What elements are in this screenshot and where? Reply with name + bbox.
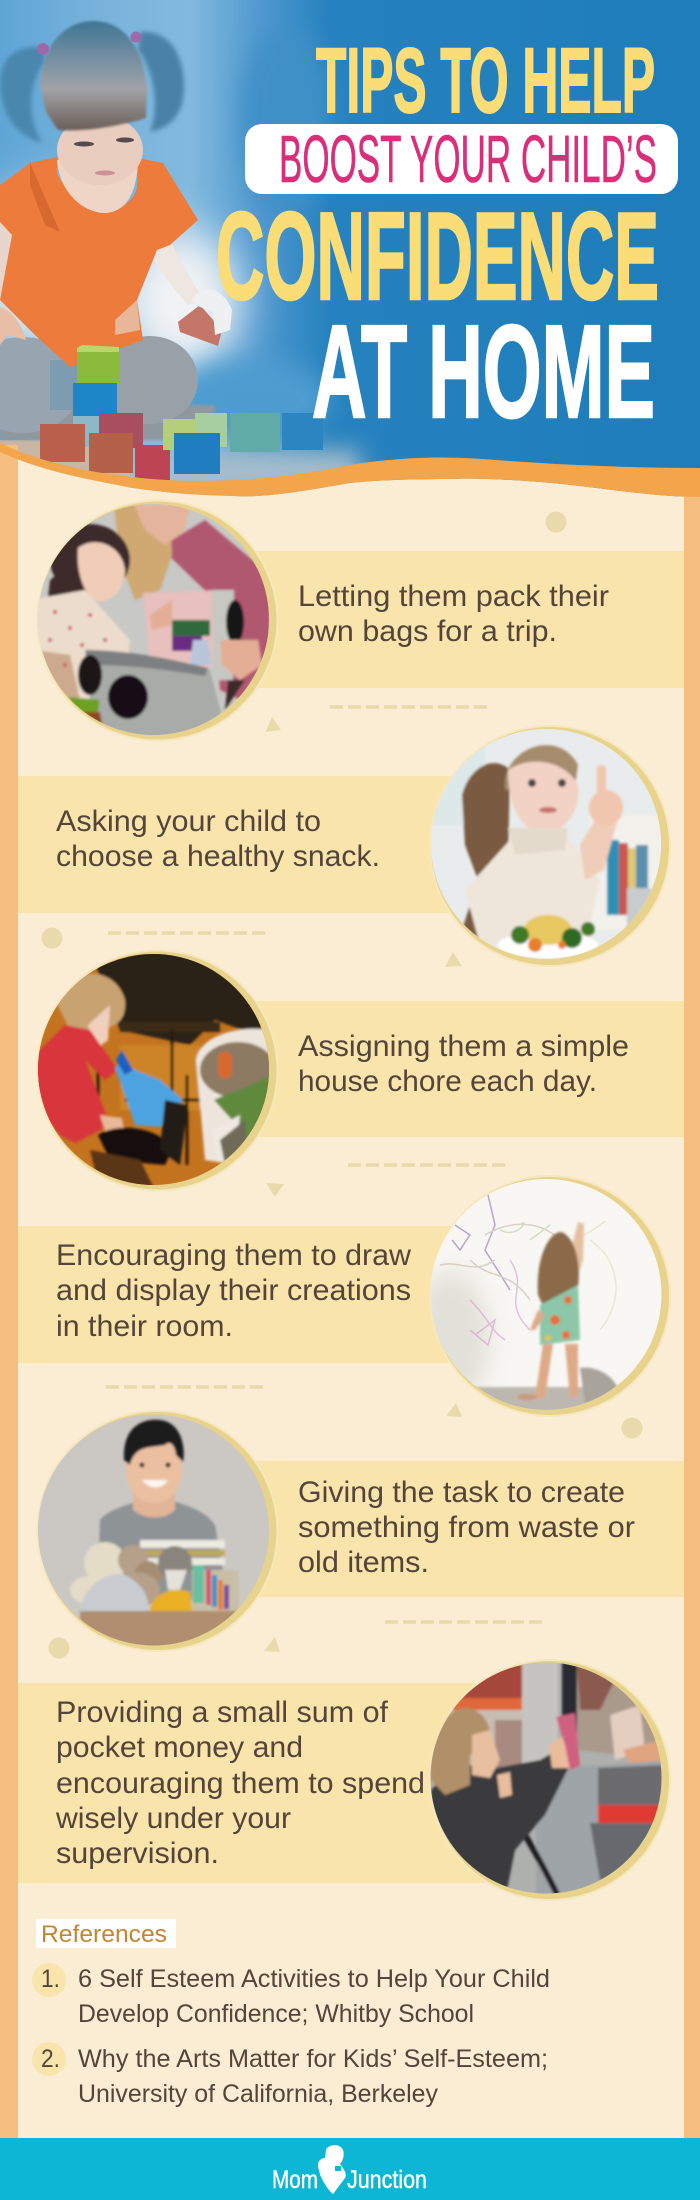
tip text: house chore each day.	[298, 1065, 597, 1098]
band	[18, 1226, 468, 1363]
title pill	[245, 124, 678, 194]
tip text: Letting them pack their	[298, 580, 609, 613]
band	[18, 1683, 488, 1883]
tip text: Giving the task to create	[298, 1476, 625, 1509]
logo: MomJunction: Junction	[347, 2166, 427, 2194]
tip text: choose a healthy snack.	[56, 840, 380, 873]
left hand	[0, 307, 26, 345]
rug and legs	[0, 405, 215, 440]
logo: MomJunction: Mom	[272, 2166, 318, 2194]
tip text: Providing a small sum of	[56, 1696, 389, 1729]
panel: tip 1	[30, 500, 684, 745]
icon: mother and child heart	[318, 2145, 346, 2194]
band	[240, 1461, 684, 1597]
photo ring	[430, 726, 670, 966]
photo: boy with a box of toys	[38, 1414, 269, 1646]
shirt and body	[0, 222, 12, 300]
tip text: own bags for a trip.	[298, 615, 557, 648]
panel: tip 5	[30, 1410, 684, 1658]
photo ring	[38, 1411, 278, 1651]
reference 2	[32, 2042, 548, 2108]
reference 1: Develop Confidence; Whitby School	[78, 2000, 474, 2028]
tip text: something from waste or	[298, 1511, 635, 1544]
panel: tip 4	[18, 1175, 670, 1438]
title	[216, 30, 678, 445]
band	[18, 776, 468, 913]
tip text: supervision.	[56, 1837, 219, 1870]
photo ring	[430, 1660, 670, 1900]
band	[240, 1001, 684, 1137]
footer	[0, 2138, 700, 2200]
photo ring	[38, 500, 278, 740]
photo: girl thumbs up with a healthy plate	[431, 729, 661, 959]
reference 1: 1.	[41, 1965, 60, 1993]
panel: tip 3	[30, 950, 684, 1197]
reference 2: Why the Arts Matter for Kids’ Self-Esteem;	[78, 2045, 548, 2073]
tip text: wisely under your	[55, 1802, 291, 1835]
decoration	[266, 512, 566, 732]
panel: tip 2	[18, 725, 670, 967]
cream page body	[0, 445, 700, 2200]
logo: MomJunction	[272, 2145, 427, 2194]
photo ring	[38, 950, 278, 1190]
pigtails	[0, 32, 184, 143]
tip text: old items.	[298, 1546, 429, 1579]
photo: child paying at a checkout	[425, 1660, 670, 1900]
tip text: in their room.	[56, 1310, 233, 1343]
tip text: pocket money and	[56, 1731, 303, 1764]
decoration	[42, 928, 462, 967]
reference 2: 2.	[41, 2045, 60, 2073]
references heading: References	[41, 1921, 167, 1948]
orange wave divider	[0, 443, 700, 497]
blocks	[77, 352, 119, 384]
tip text: Asking your child to	[56, 805, 321, 838]
tip text: and display their creations	[56, 1274, 411, 1307]
band	[240, 551, 684, 688]
photo: child sweeping a spill	[38, 954, 269, 1185]
panel: tip 6	[18, 1660, 670, 1900]
tip text: encouraging them to spend	[56, 1767, 425, 1800]
photo ring	[430, 1176, 670, 1416]
photo: girl drawing on a wall	[430, 1179, 662, 1410]
reference 2: University of California, Berkeley	[78, 2080, 438, 2108]
hair	[40, 21, 147, 130]
decoration	[48, 1622, 542, 1658]
references	[32, 1919, 550, 2108]
neck and face	[57, 160, 138, 213]
decoration	[266, 1165, 505, 1197]
decoration	[106, 1387, 642, 1438]
tip text: Assigning them a simple	[298, 1030, 629, 1063]
photo: mother and girl packing a bag	[38, 504, 269, 735]
reference 1: 6 Self Esteem Activities to Help Your Child	[78, 1965, 550, 1993]
header photo: girl playing with blocks	[0, 0, 700, 500]
reference 1	[32, 1963, 550, 2028]
tip text: Encouraging them to draw	[56, 1239, 411, 1272]
